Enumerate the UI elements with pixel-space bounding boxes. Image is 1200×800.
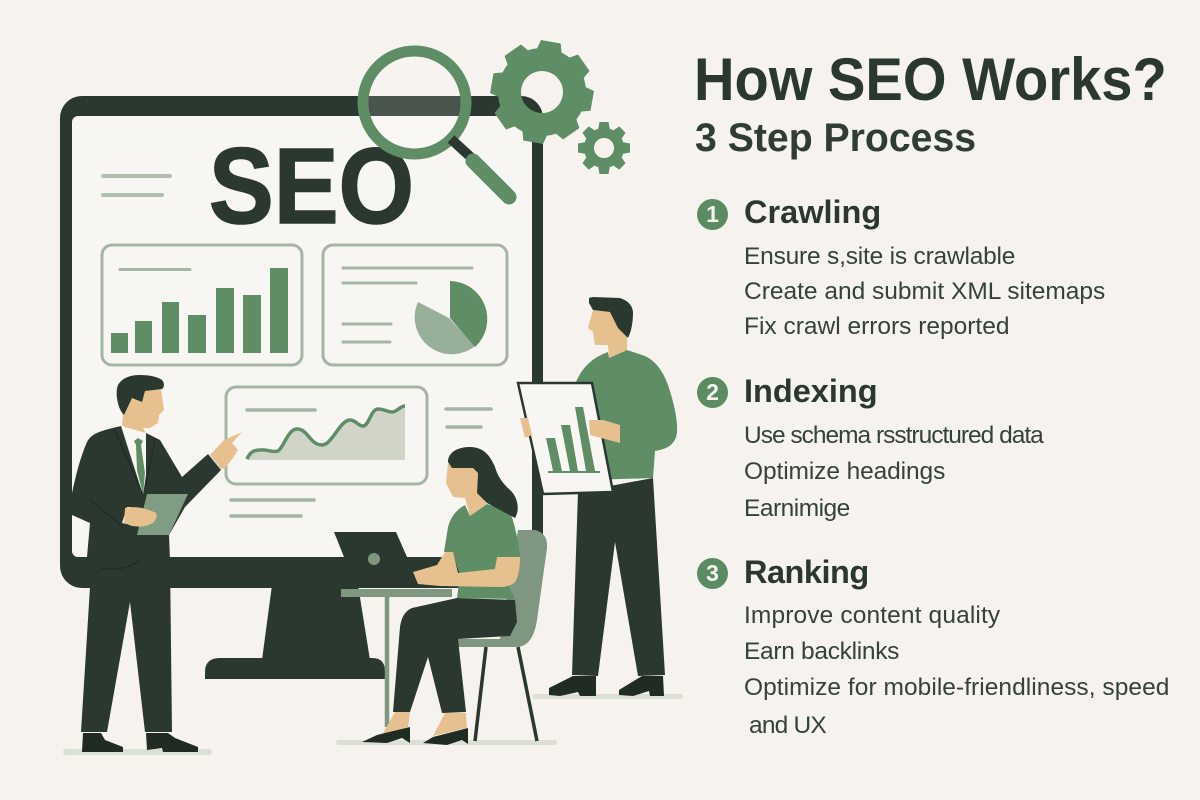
icon: laptop [334,532,407,565]
step 1 heading: Crawling [744,194,881,230]
step 2 text: Optimize headings [744,458,945,485]
hands [589,420,620,443]
trousers [572,478,665,676]
step 3 heading: Ranking [744,554,869,590]
shoes [549,676,596,696]
icon: magnifying glass [363,51,509,197]
chart board [518,383,613,494]
text lines top left [103,176,170,195]
sweater [576,350,677,480]
badge: step 1: 1 [706,201,719,227]
screen title: SEO [209,125,414,246]
step 2 text: Use schema rsstructured data [744,422,1043,449]
suit creases [90,430,155,569]
step 2 text: Earnimige [744,495,850,522]
cuff [122,507,131,524]
monitor stand [262,585,370,660]
panel: bar chart [102,245,302,365]
person: standing man with chart board [518,297,677,696]
monitor frame [60,96,543,588]
person: man in suit with tablet [72,375,242,752]
hair [117,375,164,415]
panel: line chart [226,387,427,484]
badge: step 3 [697,558,728,589]
hair [589,297,633,338]
step 3 text: Improve content quality [744,602,1000,629]
desk [340,557,462,727]
pointing hand [210,432,242,469]
shirt [121,426,146,495]
step 3 text: Optimize for mobile-friendliness, speed [744,674,1169,701]
tablet [137,494,188,535]
step 1 text: Fix crawl errors reported [744,313,1009,340]
badge: step 1 [697,199,728,230]
step 1 text: Ensure s,site is crawlable [744,243,1015,270]
step 2 text [744,422,1044,522]
arm and hands [413,552,520,587]
subtitle: 3 Step Process [695,116,976,160]
neck and face [588,310,627,358]
badge: step 2: 2 [706,379,719,405]
icon: large gear [483,33,601,151]
shoes [82,733,123,752]
step 1 text: Create and submit XML sitemaps [744,278,1105,305]
badge: step 2 [697,377,728,408]
holding hand [124,507,157,527]
person: woman at laptop [362,447,520,745]
shoes [362,727,410,743]
step 2 heading: Indexing [744,373,878,409]
suit [72,426,221,732]
step 3 text: and UX [749,712,826,739]
tie [134,438,145,495]
monitor screen [72,116,532,557]
title: How SEO Works? [694,46,1167,113]
floor shadows [63,694,683,755]
monitor [60,96,543,679]
badge: step 3: 3 [706,560,719,586]
step 1 text [744,243,1105,340]
face and neck [446,463,487,516]
step 3 text: Earn backlinks [744,638,899,665]
icon: small gear [578,122,630,174]
top [444,504,520,599]
text lines [231,409,491,516]
illustration: SEO monitor with people [60,40,683,755]
hair [448,447,518,518]
panel: pie chart [323,245,507,365]
step 3 text [744,602,1169,739]
chair [458,530,547,741]
ankles [382,712,410,735]
trousers [393,598,517,713]
face and neck [122,389,164,436]
